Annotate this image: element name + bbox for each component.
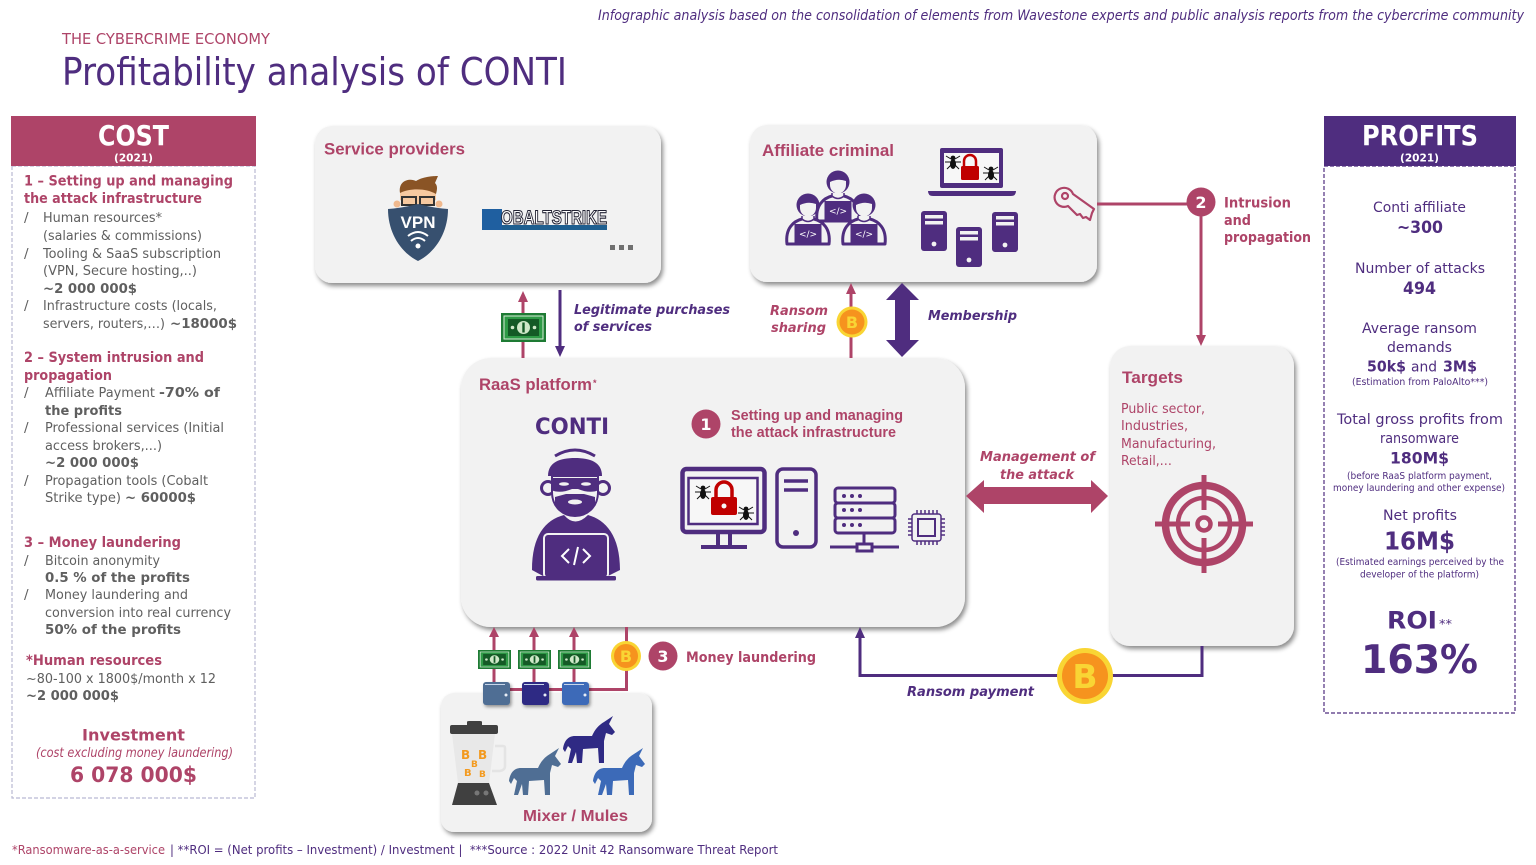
section 1 cost: / xyxy=(24,246,29,262)
arrow: ransom sharing xyxy=(846,283,856,358)
ransom sharing label xyxy=(770,303,828,336)
affiliates stat: Conti affiliate xyxy=(1373,200,1466,216)
management label: Management of xyxy=(980,449,1097,465)
management label xyxy=(980,449,1097,483)
net profits stat: Net profits xyxy=(1383,508,1457,524)
step 2 badge xyxy=(1186,188,1216,216)
ROI stat: 163% xyxy=(1361,638,1478,683)
icon: blender: B xyxy=(464,768,472,779)
step 3 badge xyxy=(648,642,678,670)
section 1 cost: ~2 000 000$ xyxy=(43,281,137,297)
icon: bitcoin coin small top xyxy=(836,306,868,338)
management label: the attack xyxy=(1000,467,1075,483)
intrusion label: and xyxy=(1224,213,1251,229)
panel: cost xyxy=(11,116,256,798)
intrusion label: propagation xyxy=(1224,230,1311,246)
icon: VPN shield xyxy=(388,176,448,261)
icon: server rack xyxy=(830,488,899,551)
ransom demands stat: Average ransom xyxy=(1362,321,1477,337)
gross profits stat: Total gross profits from xyxy=(1336,412,1503,428)
section 1 cost: / xyxy=(24,298,29,314)
section 3 cost: Money laundering and xyxy=(45,587,188,603)
mixer label: Mixer / Mules xyxy=(523,808,628,825)
icon: infected monitor xyxy=(682,469,764,547)
icon: key xyxy=(1055,188,1094,220)
section 2 cost xyxy=(24,350,224,506)
net profits stat xyxy=(1336,508,1504,580)
section 3 cost: 3 – Money laundering xyxy=(24,535,181,551)
targets list: Industries, xyxy=(1121,418,1188,434)
ROI stat: ROI xyxy=(1387,606,1437,634)
targets list: Manufacturing, xyxy=(1121,436,1216,452)
arrow: intrusion xyxy=(1097,204,1206,346)
ellipsis xyxy=(610,245,633,250)
arrow: ransom payment xyxy=(855,627,1202,676)
arrow: payment to service providers xyxy=(518,291,528,358)
section 2 cost: / xyxy=(24,473,29,489)
icon: bitcoin coin laundering xyxy=(611,641,641,671)
gross profits stat xyxy=(1333,412,1505,494)
targets list xyxy=(1121,401,1216,469)
step 1 label: the attack infrastructure xyxy=(731,425,896,441)
title: Profitability analysis of CONTI xyxy=(62,50,567,94)
CONTI label: CONTI xyxy=(535,415,609,440)
gross profits stat: ransomware xyxy=(1380,431,1459,447)
attacks stat: 494 xyxy=(1403,279,1436,299)
panel: RaaS platform xyxy=(461,358,965,627)
section 2 cost: -70% of xyxy=(159,385,220,401)
ransom demands stat: 3M$ xyxy=(1443,358,1477,376)
icon: target xyxy=(1155,475,1253,573)
icons: wallets xyxy=(483,682,589,705)
cost year: (2021) xyxy=(114,152,153,164)
intrusion label: Intrusion xyxy=(1224,196,1291,212)
membership label: Membership xyxy=(928,308,1017,324)
step 1 label xyxy=(731,408,903,441)
money laundering label: Money laundering xyxy=(686,650,816,666)
human resources note: ~2 000 000$ xyxy=(26,688,119,704)
service providers heading: Service providers xyxy=(324,140,465,158)
section 3 cost: 0.5 % of the profits xyxy=(45,570,190,586)
targets heading: Targets xyxy=(1122,368,1183,387)
section 3 cost: / xyxy=(24,587,29,603)
icon: blender xyxy=(450,721,505,805)
section 1 cost: Tooling & SaaS subscription xyxy=(42,246,221,262)
section 1 cost xyxy=(24,174,237,332)
affiliate heading: Affiliate criminal xyxy=(762,141,894,160)
icon: hacker xyxy=(532,450,620,580)
kicker: THE CYBERCRIME ECONOMY xyxy=(61,30,271,48)
section 2 cost: / xyxy=(24,385,29,401)
ransom sharing label: Ransom xyxy=(770,303,828,319)
section 1 cost: (salaries & commissions) xyxy=(43,228,202,244)
legitimate purchases label: Legitimate purchases xyxy=(574,302,730,318)
gross profits stat: 180M$ xyxy=(1390,448,1449,468)
ROI stat xyxy=(1361,606,1478,683)
ransom payment label: Ransom payment xyxy=(907,684,1035,700)
panel: service providers xyxy=(315,126,661,283)
footnotes: | **ROI = (Net profits – Investment) / Investment | ***Source : 2022 Unit 42 Ransomware Threat Report xyxy=(170,842,778,857)
section 2 cost: propagation xyxy=(24,368,112,384)
section 2 cost: ~ 60000$ xyxy=(125,490,196,506)
section 3 cost: Bitcoin anonymity xyxy=(45,553,160,569)
section 1 cost: ~18000$ xyxy=(170,316,237,332)
affiliates stat xyxy=(1373,200,1466,238)
section 1 cost: / xyxy=(24,210,29,226)
panel: profits xyxy=(1324,116,1516,713)
section 2 cost: Strike type) xyxy=(45,490,121,506)
section 2 cost: Professional services (Initial xyxy=(45,420,224,436)
section 1 cost: Infrastructure costs (locals, xyxy=(43,298,217,314)
ransom demands stat: (Estimation from PaloAlto***) xyxy=(1352,377,1488,388)
panel: affiliate criminal xyxy=(750,125,1097,282)
section 2 cost: Affiliate Payment xyxy=(45,385,155,401)
icon: bitcoin coin small top: B xyxy=(846,313,858,332)
RaaS heading: * xyxy=(593,378,597,388)
section 1 cost: Human resources* xyxy=(43,210,162,226)
profits year: (2021) xyxy=(1400,152,1439,164)
footnotes: *Ransomware-as-a-service xyxy=(12,842,165,857)
arrow: services down xyxy=(555,290,565,357)
human resources note xyxy=(26,653,216,704)
intrusion label xyxy=(1224,196,1311,246)
affiliates stat: ~300 xyxy=(1397,218,1443,238)
investment total: (cost excluding money laundering) xyxy=(36,746,233,761)
arrow: membership double xyxy=(886,283,919,357)
legitimate purchases label xyxy=(574,302,730,335)
section 1 cost: (VPN, Secure hosting,..) xyxy=(43,263,197,279)
gross profits stat: (before RaaS platform payment, xyxy=(1347,471,1492,482)
icon: blender: B xyxy=(461,748,470,762)
RaaS heading: RaaS platform xyxy=(479,375,592,394)
section 1 cost: servers, routers,…) xyxy=(43,316,165,332)
attacks stat: Number of attacks xyxy=(1355,261,1485,277)
section 2 cost: Propagation tools (Cobalt xyxy=(45,473,208,489)
section 2 cost: / xyxy=(24,420,29,436)
section 1 cost: the attack infrastructure xyxy=(24,191,202,207)
icon: blender: B xyxy=(471,760,478,770)
icon: bitcoin coin large xyxy=(1057,648,1113,704)
icon: blender: B xyxy=(479,770,486,780)
net profits stat: developer of the platform) xyxy=(1360,570,1479,580)
investment total xyxy=(36,726,233,787)
net profits stat: (Estimated earnings perceived by the xyxy=(1336,557,1504,568)
profits heading: PROFITS xyxy=(1362,119,1478,152)
investment total: 6 078 000$ xyxy=(70,763,197,787)
section 3 cost: conversion into real currency xyxy=(45,605,231,621)
targets list: Public sector, xyxy=(1121,401,1205,417)
section 2 cost: access brokers,...) xyxy=(45,438,162,454)
section 3 cost xyxy=(24,535,231,638)
panel: mixer and mules xyxy=(441,693,652,832)
icon: infected laptop xyxy=(928,148,1016,196)
step 1 label: Setting up and managing xyxy=(731,408,903,424)
section 3 cost: 50% of the profits xyxy=(45,622,181,638)
targets list: Retail,… xyxy=(1121,453,1172,469)
icon: cash bill xyxy=(501,313,546,342)
icon: bitcoin coin laundering: B xyxy=(620,647,632,666)
human resources note: ~80-100 x 1800$/month x 12 xyxy=(26,671,216,687)
icon: servers xyxy=(921,211,1018,267)
step 1 badge: 1 xyxy=(700,415,712,434)
step 3 badge: 3 xyxy=(657,647,669,666)
gross profits stat: money laundering and other expense) xyxy=(1333,483,1505,494)
icon: blender: B xyxy=(478,748,487,762)
section 3 cost: / xyxy=(24,553,29,569)
icon: blue unicorn xyxy=(593,748,645,795)
step 2 badge: 2 xyxy=(1195,193,1207,212)
arrows: laundering flows xyxy=(489,627,626,692)
section 2 cost: the profits xyxy=(45,403,122,419)
legitimate purchases label: of services xyxy=(574,319,652,335)
ransom demands stat: and xyxy=(1411,360,1437,376)
cost heading: COST xyxy=(98,119,169,152)
panel: targets xyxy=(1110,346,1294,646)
icon: tower xyxy=(777,469,816,547)
step 1 badge xyxy=(692,410,720,438)
icon: coders xyxy=(787,170,885,246)
icon: bitcoin coin large: B xyxy=(1072,657,1098,696)
arrow: management double xyxy=(966,480,1108,513)
section 2 cost: 2 – System intrusion and xyxy=(24,350,204,366)
icon: chip xyxy=(908,510,945,545)
icon: cobalt strike logo: OBALTSTRIKE xyxy=(501,208,607,229)
ransom sharing label: sharing xyxy=(771,320,826,336)
section 1 cost: 1 – Setting up and managing xyxy=(24,174,233,190)
icon: cobalt strike logo xyxy=(482,208,607,230)
icon: VPN shield: VPN xyxy=(401,213,435,232)
human resources note: *Human resources xyxy=(26,653,162,669)
ROI stat: ** xyxy=(1439,617,1452,631)
section 2 cost: ~2 000 000$ xyxy=(45,455,139,471)
icons: laundered cash bills xyxy=(478,650,591,669)
attacks stat xyxy=(1355,261,1485,299)
icon: grey-blue unicorn xyxy=(509,748,561,795)
ransom demands stat xyxy=(1352,321,1488,388)
ransom demands stat: 50k$ xyxy=(1367,358,1406,376)
icon: navy unicorn xyxy=(563,716,615,763)
investment total: Investment xyxy=(82,726,185,744)
ransom demands stat: demands xyxy=(1387,340,1452,356)
net profits stat: 16M$ xyxy=(1384,526,1455,556)
